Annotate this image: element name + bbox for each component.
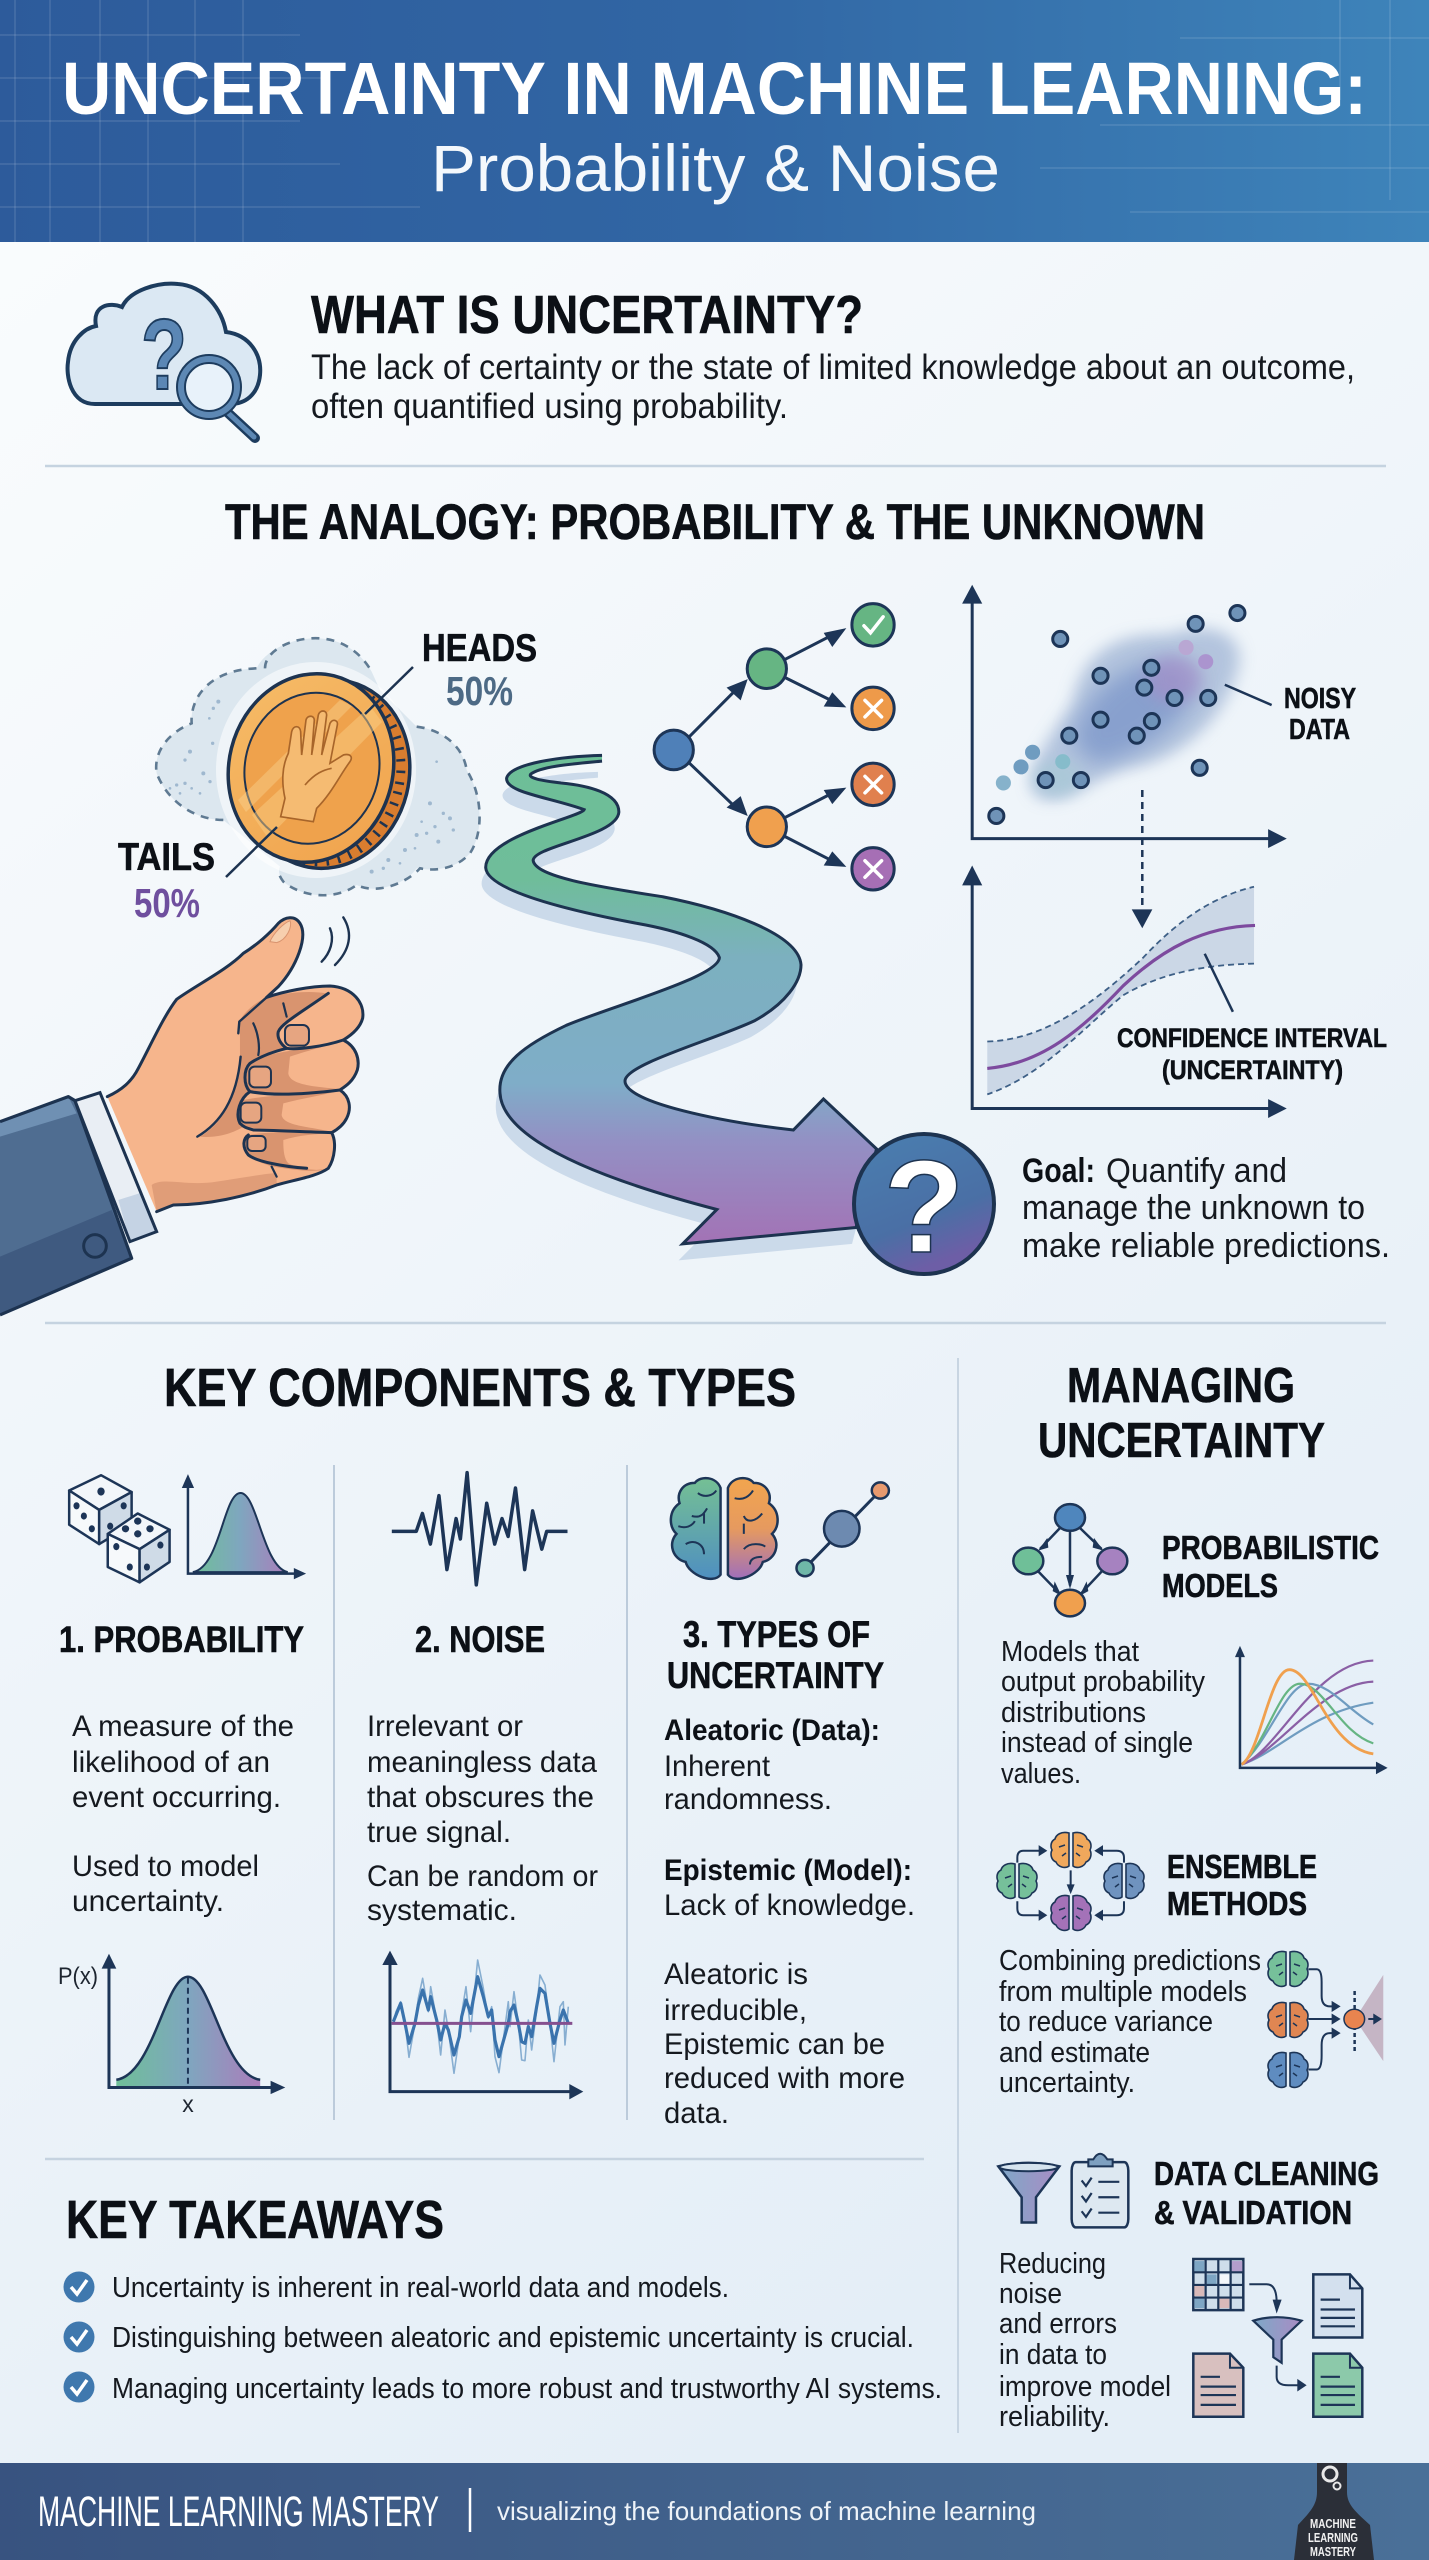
heading: managing uncertainty: MANAGING <box>1067 1359 1295 1413</box>
footer logo: LEARNING <box>1308 2530 1358 2545</box>
chart: noisy signal <box>382 1951 583 2099</box>
column 2: noise <box>367 1619 598 1927</box>
heading: key components and types: KEY COMPONENTS & TYPES <box>164 1358 796 1418</box>
icon: brain and node <box>671 1478 889 1579</box>
column 2: noise: meaningless data <box>367 1746 597 1779</box>
column 2: noise: true signal. <box>367 1816 511 1849</box>
illustration: winding path arrow <box>482 755 877 1260</box>
text: data cleaning: noise <box>999 2278 1062 2310</box>
definition text: often quantified using probability. <box>311 387 788 426</box>
heading: key takeaways: KEY TAKEAWAYS <box>66 2190 444 2250</box>
text: ensemble methods: from multiple models <box>999 1976 1247 2008</box>
chart: probability bell curve: x <box>182 2091 194 2117</box>
column 3: types of uncertainty: Aleatoric (Data): <box>664 1714 880 1747</box>
definition text: The lack of certainty or the state of limited knowledge about an outcome, <box>311 348 1355 387</box>
column 3: types of uncertainty: irreducible, <box>664 1994 807 2027</box>
column 3: types of uncertainty <box>664 1614 915 2130</box>
column 3: types of uncertainty: reduced with more <box>664 2062 905 2095</box>
chart: probability bell curve: P(x) <box>58 1963 98 1990</box>
label: heads 50% <box>422 627 537 714</box>
text: ensemble methods: to reduce variance <box>999 2006 1213 2038</box>
column 1: probability: uncertainty. <box>72 1885 224 1918</box>
takeaway 3: Managing uncertainty leads to more robust and trustworthy AI systems. <box>112 2373 942 2405</box>
icon: noise waveform <box>392 1473 568 1585</box>
heading: managing uncertainty <box>1038 1359 1325 1468</box>
heading: probabilistic models <box>1162 1529 1379 1604</box>
icon: dice and bell curve <box>69 1474 306 1582</box>
heading: managing uncertainty: UNCERTAINTY <box>1038 1414 1325 1468</box>
footer logo <box>1294 2463 1374 2560</box>
chart: confidence interval <box>962 865 1287 1118</box>
column 3: types of uncertainty: Inherent <box>664 1750 771 1783</box>
icon: question mark circle <box>854 1133 994 1280</box>
column 2: noise: 2. NOISE <box>415 1619 545 1660</box>
diagram: decision tree of outcomes <box>654 604 894 890</box>
text: probabilistic models: distributions <box>1001 1697 1146 1729</box>
column 3: types of uncertainty: Epistemic (Model): <box>664 1854 912 1887</box>
heading: ensemble methods <box>1167 1848 1317 1922</box>
column 3: types of uncertainty: data. <box>664 2097 729 2130</box>
takeaway 1: Uncertainty is inherent in real-world data and models. <box>112 2272 729 2304</box>
heading: what is uncertainty: WHAT IS UNCERTAINTY? <box>311 285 863 345</box>
text: ensemble methods <box>999 1945 1261 2099</box>
heading: probabilistic models: MODELS <box>1162 1567 1278 1604</box>
footer brand: MACHINE LEARNING MASTERY <box>38 2488 439 2536</box>
takeaway 2: Distinguishing between aleatoric and epistemic uncertainty is crucial. <box>112 2322 914 2354</box>
text: ensemble methods: Combining predictions <box>999 1945 1261 1977</box>
label: tails 50%: 50% <box>134 880 200 926</box>
text: data cleaning: Reducing <box>999 2248 1106 2280</box>
label: noisy data: DATA <box>1289 714 1350 746</box>
column 1: probability: A measure of the <box>72 1710 294 1743</box>
column 1: probability: 1. PROBABILITY <box>59 1619 304 1660</box>
label: noisy data <box>1284 683 1356 746</box>
header banner <box>0 0 1429 242</box>
label: heads 50%: 50% <box>446 668 513 714</box>
diagram: ensemble combination <box>1268 1951 1383 2087</box>
column 2: noise: systematic. <box>367 1894 517 1927</box>
label: tails 50%: TAILS <box>118 836 215 879</box>
chart: probability distributions <box>1235 1646 1388 1774</box>
footer logo: MASTERY <box>1310 2544 1356 2559</box>
column 3: types of uncertainty: Aleatoric is <box>664 1958 808 1991</box>
text: probabilistic models: output probability <box>1001 1666 1205 1698</box>
illustration: hand flicking coin <box>0 917 363 1315</box>
label: noisy data: NOISY <box>1284 683 1356 715</box>
text: data cleaning: improve model <box>999 2371 1171 2403</box>
goal text <box>1022 1152 1390 1265</box>
label: confidence interval <box>1117 1023 1387 1085</box>
footer bar <box>0 2463 1429 2560</box>
label: tails 50% <box>118 836 215 926</box>
text: data cleaning <box>999 2248 1171 2433</box>
column 3: types of uncertainty: randomness. <box>664 1783 832 1816</box>
column 2: noise: Can be random or <box>367 1860 598 1893</box>
heading: data cleaning and validation: & VALIDATION <box>1154 2194 1352 2231</box>
heading: ensemble methods: METHODS <box>1167 1885 1307 1922</box>
footer tagline: visualizing the foundations of machine learning <box>497 2496 1036 2526</box>
column 1: probability: event occurring. <box>72 1781 281 1814</box>
diagram: data cleaning pipeline <box>1193 2259 1362 2417</box>
label: confidence interval: (UNCERTAINTY) <box>1162 1055 1343 1085</box>
text: data cleaning: reliability. <box>999 2401 1110 2433</box>
label: heads 50%: HEADS <box>422 627 537 670</box>
goal text: Goal: <box>1022 1152 1095 1190</box>
heading: data cleaning and validation <box>1154 2155 1379 2231</box>
icon: question mark circle: ? <box>884 1133 964 1280</box>
heading: ensemble methods: ENSEMBLE <box>1167 1848 1317 1885</box>
goal text: Quantify and <box>1106 1152 1287 1190</box>
text: ensemble methods: uncertainty. <box>999 2067 1135 2099</box>
chart: noisy data scatter <box>962 585 1287 928</box>
subtitle: Probability & Noise <box>431 131 1000 205</box>
heading: data cleaning and validation: DATA CLEANING <box>1154 2155 1379 2192</box>
icon: cloud with question mark and magnifier <box>68 284 260 438</box>
goal text: make reliable predictions. <box>1022 1227 1390 1265</box>
goal text: manage the unknown to <box>1022 1189 1365 1227</box>
text: probabilistic models: Models that <box>1001 1636 1139 1668</box>
text: probabilistic models: instead of single <box>1001 1727 1193 1759</box>
icon: probabilistic model graph <box>1013 1504 1127 1616</box>
column 3: types of uncertainty: Epistemic can be <box>664 2028 885 2061</box>
label: confidence interval: CONFIDENCE INTERVAL <box>1117 1023 1387 1053</box>
heading: probabilistic models: PROBABILISTIC <box>1162 1529 1379 1566</box>
icon: hand on coin <box>281 711 351 822</box>
illustration: flipped coin in uncertainty cloud <box>156 638 480 895</box>
footer logo: MACHINE <box>1310 2516 1356 2531</box>
icon: cloud with question mark and magnifier: ? <box>141 299 187 411</box>
definition text <box>311 348 1355 426</box>
column 1: probability <box>59 1619 304 1918</box>
text: probabilistic models <box>1001 1636 1205 1790</box>
column 3: types of uncertainty: Lack of knowledge. <box>664 1889 915 1922</box>
text: data cleaning: and errors <box>999 2308 1117 2340</box>
column 1: probability: Used to model <box>72 1850 259 1883</box>
icon: ensemble of brains <box>997 1832 1144 1930</box>
icon: funnel and checklist <box>998 2154 1128 2227</box>
heading: the analogy: THE ANALOGY: PROBABILITY & THE UNKNOWN <box>225 494 1205 550</box>
column 2: noise: that obscures the <box>367 1781 594 1814</box>
column 3: types of uncertainty: 3. TYPES OF <box>683 1614 870 1655</box>
text: data cleaning: in data to <box>999 2339 1107 2371</box>
text: ensemble methods: and estimate <box>999 2037 1150 2069</box>
column 1: probability: likelihood of an <box>72 1746 270 1779</box>
column 3: types of uncertainty: UNCERTAINTY <box>667 1655 884 1696</box>
chart: probability bell curve <box>58 1954 285 2117</box>
column 2: noise: Irrelevant or <box>367 1710 523 1743</box>
text: probabilistic models: values. <box>1001 1758 1081 1790</box>
